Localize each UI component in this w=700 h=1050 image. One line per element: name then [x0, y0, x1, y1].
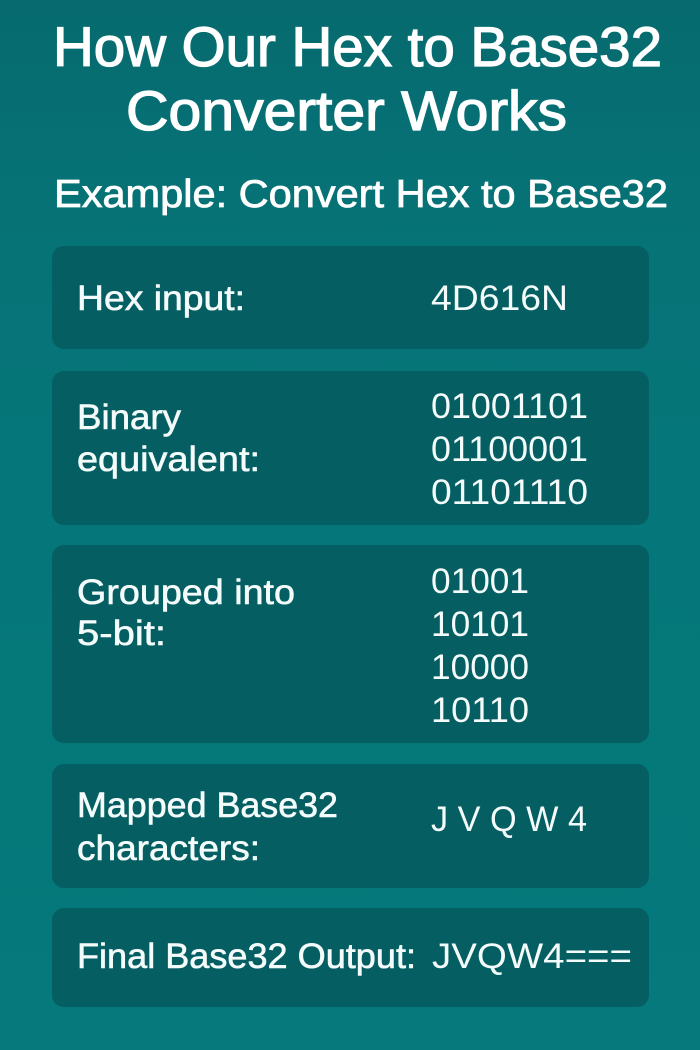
panel: binary equivalent [52, 371, 649, 525]
subtitle: Example: Convert Hex to Base32 [54, 173, 668, 216]
label: grouped into 5-bit: Grouped into [77, 573, 295, 612]
label: binary equivalent: Binary [77, 398, 182, 437]
label: binary equivalent: equivalent: [77, 440, 260, 479]
label: mapped Base32 characters: characters: [77, 829, 260, 868]
value: 5-bit groups: 01001 [431, 562, 529, 601]
title: How Our Hex to Base32 [53, 15, 662, 78]
value: 5-bit groups: 10101 [431, 605, 529, 644]
label: mapped Base32 characters [77, 786, 338, 868]
label: binary equivalent [77, 398, 260, 479]
value: 5-bit groups [431, 562, 529, 730]
title [53, 15, 662, 142]
value: binary bytes: 01001101 [431, 387, 588, 426]
value: binary bytes: 01100001 [431, 430, 588, 469]
title: Converter Works [126, 79, 567, 142]
panel: final Base32 output [52, 908, 649, 1007]
value: 5-bit groups: 10000 [431, 648, 529, 687]
value: final output: JVQW4=== [432, 937, 632, 976]
label: mapped Base32 characters: Mapped Base32 [77, 786, 338, 825]
label: hex input: Hex input: [77, 279, 245, 318]
panel: grouped into 5-bit [52, 545, 649, 743]
value: mapped characters: J V Q W 4 [431, 800, 587, 839]
value: binary bytes [431, 387, 588, 512]
label: final Base32 output: Final Base32 Output: [77, 937, 416, 976]
value: binary bytes: 01101110 [431, 473, 588, 512]
panel: hex input [52, 246, 649, 349]
value: hex input: 4D616N [431, 279, 568, 318]
value: 5-bit groups: 10110 [431, 691, 529, 730]
label: grouped into 5-bit [77, 573, 295, 653]
label: grouped into 5-bit: 5-bit: [77, 614, 166, 653]
panel: mapped Base32 characters [52, 764, 649, 888]
